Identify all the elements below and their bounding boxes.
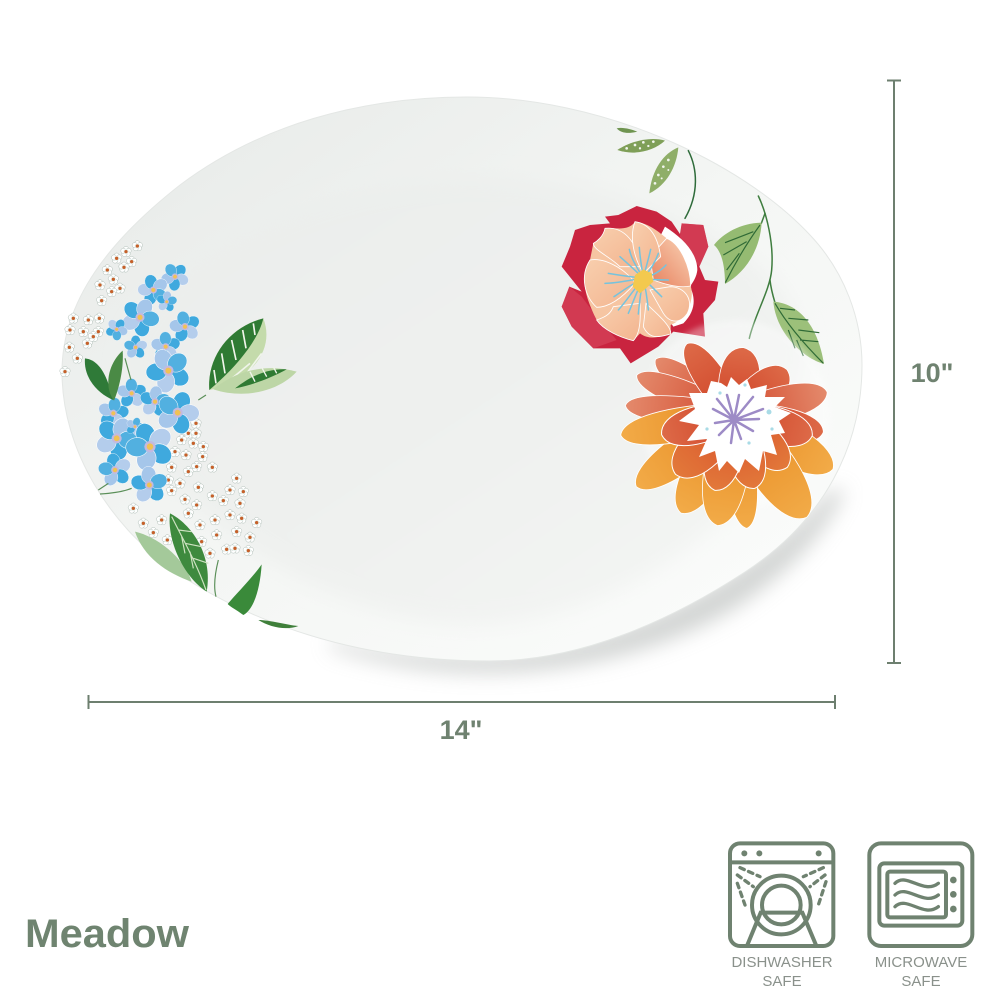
leaf: pale bottom xyxy=(135,532,192,582)
zinnia white halo xyxy=(640,320,830,510)
stems xyxy=(98,358,218,597)
dimension: width 14 inches: 14" xyxy=(440,715,482,745)
leaf: top sprig xyxy=(617,128,637,133)
peony white rim xyxy=(640,227,697,327)
leaf: big bottom xyxy=(170,513,208,592)
zinnia lavender stamens xyxy=(713,395,763,443)
icon: microwave safe xyxy=(869,843,972,946)
peony peach petals xyxy=(584,222,691,341)
leaf: rim sliver xyxy=(258,620,298,628)
dimension: height 10 inches: 10" xyxy=(911,358,953,388)
leaf: top dotted xyxy=(617,139,665,153)
right floral: stems and leaves xyxy=(617,128,824,364)
peony outer red petals xyxy=(562,206,718,363)
peony blue stamens xyxy=(605,247,668,314)
label: microwave safe: SAFE xyxy=(901,973,941,990)
peony peach base xyxy=(584,222,692,341)
zinnia flower xyxy=(618,320,843,531)
blue forget-me-nots xyxy=(90,256,207,512)
label: microwave safe: MICROWAVE xyxy=(875,954,967,971)
leaf: upper left green xyxy=(714,223,762,284)
leaf: striped dark and light xyxy=(209,318,266,390)
label: dishwasher safe: SAFE xyxy=(762,973,802,990)
peony flower xyxy=(562,206,718,363)
leaf: pair left xyxy=(85,358,113,400)
peony yellow center xyxy=(633,269,653,293)
stems xyxy=(685,151,775,338)
peony light red patches xyxy=(562,223,708,348)
leaf: striped small xyxy=(213,367,297,394)
plate shadow xyxy=(330,490,845,673)
zinnia outer petals xyxy=(618,335,843,531)
left floral xyxy=(60,241,298,628)
title: Meadow: Meadow xyxy=(25,912,190,956)
leaf: bottom right xyxy=(228,564,262,615)
dimension: height 10 inches xyxy=(887,80,953,663)
label: dishwasher safe: DISHWASHER xyxy=(731,954,833,971)
dimension: width 14 inches xyxy=(88,695,835,745)
icon: dishwasher safe xyxy=(730,843,833,946)
zinnia inner petals xyxy=(657,397,817,495)
zinnia white center xyxy=(679,377,791,473)
leaf: upper stem dotted xyxy=(649,147,678,193)
oval platter xyxy=(62,97,862,661)
white blossoms xyxy=(60,241,262,558)
leaf: lower right green xyxy=(773,302,824,364)
zinnia blue dots xyxy=(705,383,774,445)
leaf: pair right xyxy=(108,351,123,401)
